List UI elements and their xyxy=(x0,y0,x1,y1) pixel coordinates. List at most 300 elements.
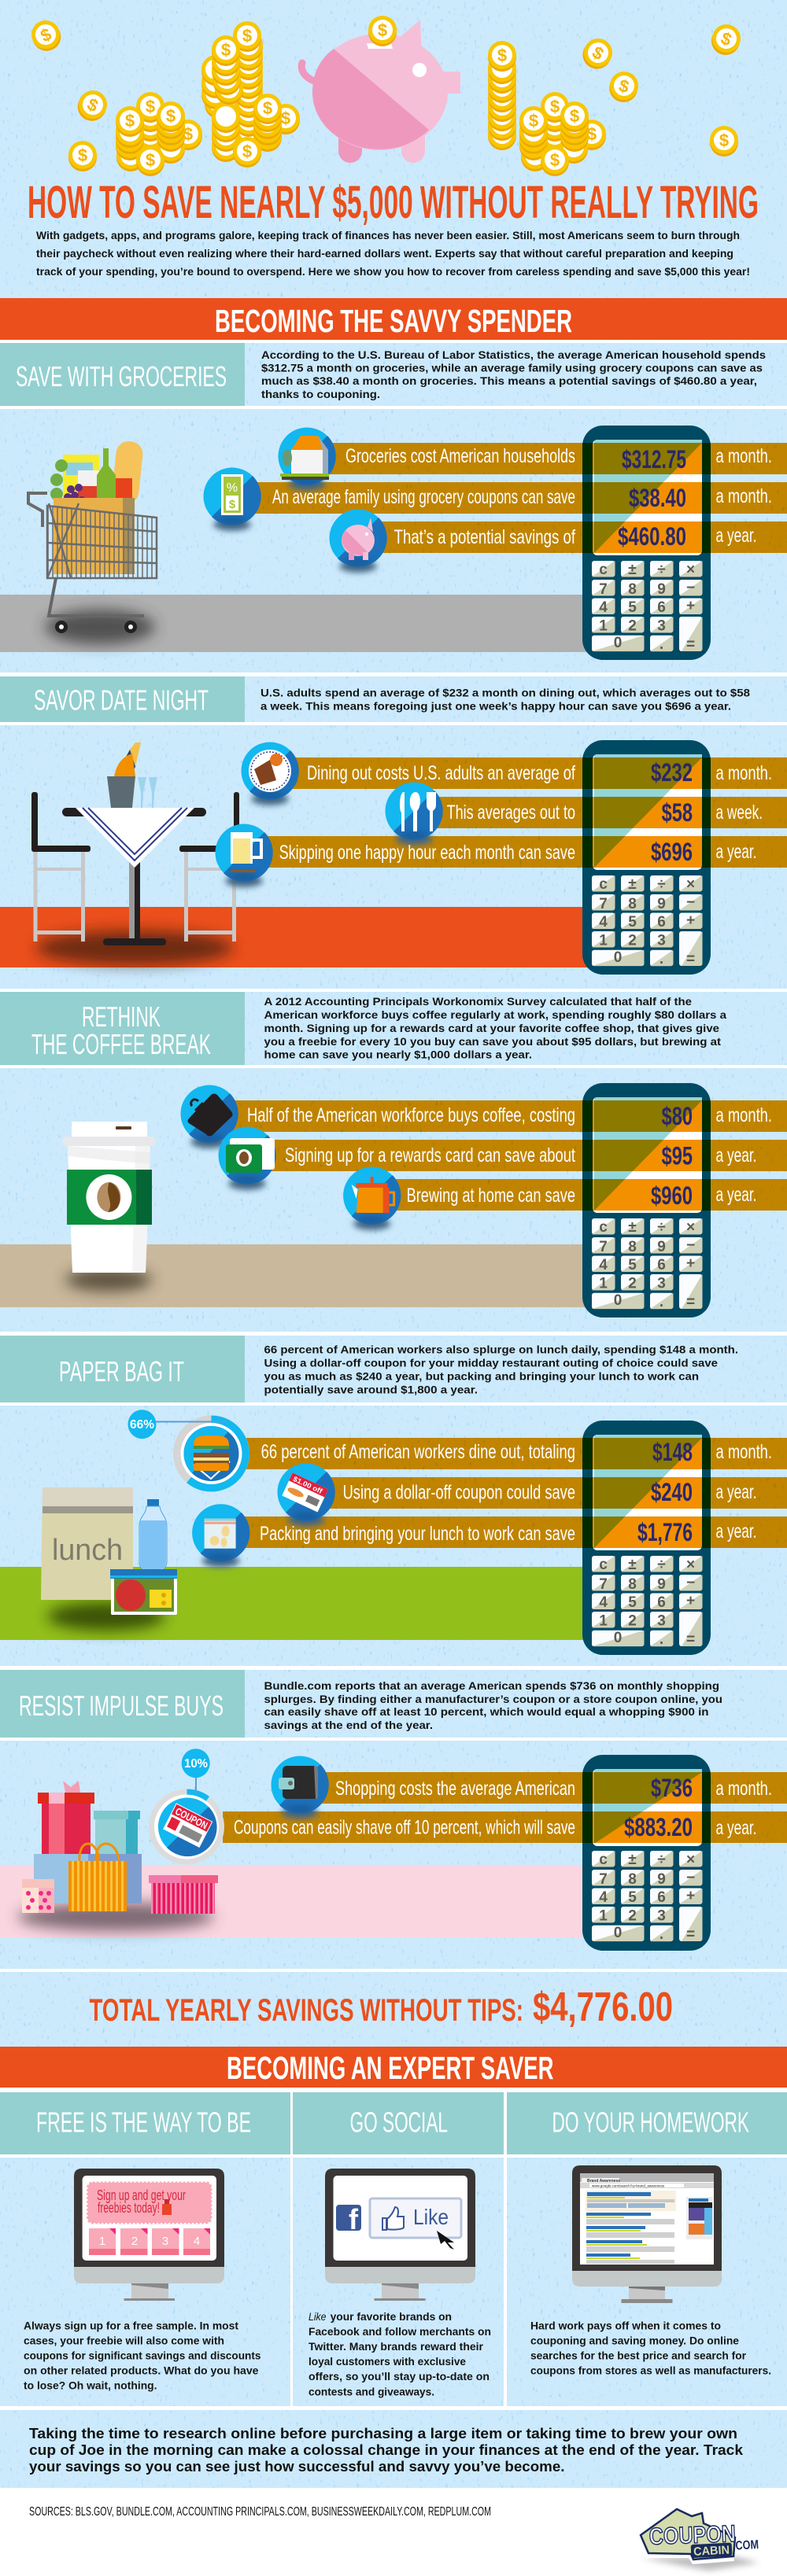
calculator: = xyxy=(686,636,695,653)
paragraph: According to the U.S. Bureau of Labor Statistics, the average American household spends xyxy=(261,348,766,361)
section header: THE COFFEE BREAK xyxy=(31,1028,211,1060)
total yearly savings xyxy=(0,1969,787,2030)
section header xyxy=(0,992,245,1065)
tip text: social xyxy=(309,2310,491,2397)
tip header: do your homework xyxy=(507,2092,787,2154)
tip text: social: contests and giveaways. xyxy=(309,2385,434,2397)
coins: tall heap: $ xyxy=(242,26,252,46)
coins: tall heap: $ xyxy=(221,40,231,60)
section header xyxy=(0,343,245,406)
time labels xyxy=(716,762,772,863)
icon: beer xyxy=(216,824,273,887)
icon: pig xyxy=(329,510,387,573)
calculator: 6 xyxy=(657,599,666,616)
calculator: 0 xyxy=(614,1292,622,1309)
intro text: track of your spending, you’re bound to overspend. Here we show you how to recover from careless spending and save $5,000 this year! xyxy=(36,265,750,278)
time labels: a year. xyxy=(716,1817,757,1839)
tip text: social: Like xyxy=(309,2310,327,2323)
savings bars xyxy=(223,1772,787,1843)
intro text: their paycheck without even realizing where their hard-earned dollars went. Experts say that without careful preparation and keeping xyxy=(36,247,733,260)
calculator: c xyxy=(599,876,608,893)
logo: coupon cabin: COUPON xyxy=(648,2521,736,2550)
logo: coupon cabin: CABIN xyxy=(693,2544,730,2559)
time labels: a year. xyxy=(716,1481,757,1503)
illustration: piggy bank and coins xyxy=(27,16,745,176)
time labels xyxy=(716,1778,772,1839)
savings bars xyxy=(209,1100,787,1211)
calculator: . xyxy=(660,951,663,967)
section header: SAVOR DATE NIGHT xyxy=(34,684,209,716)
panel: resist impulse buys xyxy=(0,1666,787,1951)
bar labels: Groceries cost American households xyxy=(345,445,575,467)
tip header: free is the way to be: FREE IS THE WAY TO BE xyxy=(36,2106,251,2138)
calculator: 6 xyxy=(657,1889,666,1906)
calculator: 4 xyxy=(599,1889,608,1906)
calculator: 2 xyxy=(628,933,637,949)
bar labels: Brewing at home can save xyxy=(407,1185,575,1207)
calculator: − xyxy=(686,1575,695,1591)
calculator: 4 xyxy=(599,599,608,616)
calculator: 9 xyxy=(657,896,666,912)
paragraph xyxy=(264,995,726,1060)
paragraph: home can save you nearly $1,000 dollars a year. xyxy=(264,1048,532,1060)
calculator: 9 xyxy=(657,581,666,598)
heading band: becoming the savvy spender xyxy=(0,298,787,340)
calculator: 1 xyxy=(599,1276,608,1292)
floor xyxy=(0,595,598,652)
tip text: free samples: Always sign up for a free sample. In most xyxy=(24,2319,238,2331)
icon: wallet xyxy=(271,1756,329,1819)
tip text: homework: coupons from stores as well as manufacturers. xyxy=(530,2364,771,2377)
coins: tall heap: $ xyxy=(242,142,252,161)
tip text: social: Twitter. Many brands reward their xyxy=(309,2340,484,2353)
closing text: your savings so you can see just how successful and savvy you’ve become. xyxy=(29,2459,565,2475)
calculator: ± xyxy=(628,1219,637,1236)
calculator: 3 xyxy=(657,1276,666,1292)
tip header: go social: GO SOCIAL xyxy=(349,2106,448,2138)
gift boxes xyxy=(17,1781,218,1931)
coins: left pile: $ xyxy=(146,97,155,116)
icon: plate xyxy=(241,743,299,805)
tip text: free samples: to lose? Oh wait, nothing. xyxy=(24,2379,157,2391)
calculator: 8 xyxy=(628,896,637,912)
calculator: 4 xyxy=(599,914,608,931)
closing text xyxy=(0,2406,787,2475)
calculator: 7 xyxy=(599,1239,608,1255)
amounts: $1,776 xyxy=(637,1518,693,1546)
paragraph: you a freebie for every 10 you buy can save you about $95 dollars, but brewing at xyxy=(264,1035,721,1048)
monitor: freebies sign up: 4 xyxy=(194,2235,200,2248)
calculator: . xyxy=(660,1631,663,1648)
icon: cutlery xyxy=(386,782,443,846)
calculator: 2 xyxy=(628,1276,637,1292)
tip text: homework: Hard work pays off when it comes to xyxy=(530,2319,721,2331)
intro text xyxy=(36,229,750,278)
floor xyxy=(0,1244,598,1307)
tip text: social: offers, so you’ll stay up-to-date on xyxy=(309,2370,490,2383)
amounts: $460.80 xyxy=(618,522,686,551)
section header: RESIST IMPULSE BUYS xyxy=(19,1690,224,1722)
calculator: 3 xyxy=(657,1612,666,1630)
paragraph: a week. This means foregoing just one week’s happy hour can save you $696 a year. xyxy=(260,700,731,713)
coins: scattered singles: $ xyxy=(719,131,729,150)
amounts: $736 xyxy=(651,1774,693,1802)
calculator: 7 xyxy=(599,1871,608,1888)
calculator: 8 xyxy=(628,1871,637,1888)
amounts xyxy=(618,445,686,551)
tip text: free samples: on other related products. What do you have xyxy=(24,2364,259,2377)
time labels: a year. xyxy=(716,841,757,863)
icon: coffee pot xyxy=(343,1167,401,1230)
calculator: 1 xyxy=(599,933,608,949)
paragraph: U.S. adults spend an average of $232 a month on dining out, which averages out to $58 xyxy=(260,686,750,698)
icon: dollar off coupon xyxy=(277,1463,335,1527)
calculator xyxy=(582,1421,711,1655)
piggy bank xyxy=(301,20,460,163)
coins: tall heap: $ xyxy=(281,109,290,128)
icon: coupon: % xyxy=(227,481,238,495)
bar labels: 66 percent of American workers dine out, totaling xyxy=(261,1441,575,1463)
closing text: Taking the time to research online before purchasing a large item or taking time to brew your own xyxy=(29,2426,737,2441)
monitor: freebies sign up: 3 xyxy=(162,2235,168,2248)
calculator: 8 xyxy=(628,1239,637,1255)
coins: right pile xyxy=(519,92,606,176)
callout: 66 percent xyxy=(127,1410,227,1439)
paragraph xyxy=(264,1679,722,1731)
time labels: a year. xyxy=(716,1144,757,1166)
calculator: ÷ xyxy=(657,1219,666,1236)
bar labels: Skipping one happy hour each month can save xyxy=(279,842,575,864)
bar labels: Packing and bringing your lunch to work can save xyxy=(260,1523,575,1545)
tip text: social: loyal customers with exclusive xyxy=(309,2355,466,2368)
amounts: $312.75 xyxy=(622,445,686,474)
calculator: 7 xyxy=(599,896,608,912)
panel: save with groceries xyxy=(0,340,787,660)
paragraph: month. Signing up for a rewards card at your favorite coffee shop, that gives give xyxy=(264,1022,719,1034)
calculator: ÷ xyxy=(657,562,666,578)
calculator: c xyxy=(599,1852,608,1868)
floor xyxy=(0,1865,598,1937)
total yearly savings: $4,776.00 xyxy=(533,1985,673,2030)
paragraph: can easily shave off at least 10 percent, which would equal a whopping $900 in xyxy=(264,1705,708,1718)
total yearly savings: TOTAL YEARLY SAVINGS WITHOUT TIPS: xyxy=(90,1993,523,2028)
bar labels: That’s a potential savings of xyxy=(394,526,575,548)
calculator: . xyxy=(660,636,663,653)
bar labels xyxy=(279,762,575,864)
calculator: c xyxy=(599,1557,608,1573)
heading band: becoming the savvy spender: BECOMING THE SAVVY SPENDER xyxy=(215,303,572,339)
paragraph: Using a dollar-off coupon for your midday restaurant outing of choice could save xyxy=(264,1356,718,1369)
coins: left pile: $ xyxy=(183,124,193,144)
panel: expert saver tips xyxy=(0,2088,787,2406)
coins: right column: $ xyxy=(497,46,507,65)
coins: scattered singles: $ xyxy=(37,24,54,46)
calculator: + xyxy=(686,912,695,929)
calculator: 1 xyxy=(599,1908,608,1924)
calculator: 0 xyxy=(614,949,622,966)
bar labels: Shopping costs the average American xyxy=(335,1778,575,1800)
paragraph: much as $38.40 a month on groceries. This means a potential savings of $460.80 a year, xyxy=(261,374,757,387)
calculator: 5 xyxy=(628,599,637,616)
amounts: $58 xyxy=(662,798,693,827)
calculator: × xyxy=(686,1219,695,1236)
amounts xyxy=(637,1438,693,1546)
bar labels: Dining out costs U.S. adults an average of xyxy=(307,762,575,784)
section header: SAVE WITH GROCERIES xyxy=(16,360,227,392)
calculator: . xyxy=(660,1294,663,1310)
paragraph: 66 percent of American workers also splurge on lunch daily, spending $148 a month. xyxy=(264,1343,738,1356)
calculator: 5 xyxy=(628,1594,637,1611)
time labels: a year. xyxy=(716,1184,757,1206)
monitor: search results: Brand Awareness xyxy=(587,2179,620,2184)
coins: right pile: $ xyxy=(570,106,579,126)
coins: right pile: $ xyxy=(550,97,560,116)
time labels: a year. xyxy=(716,1520,757,1542)
calculator: ± xyxy=(628,562,637,578)
tip header: free is the way to be xyxy=(0,2092,290,2154)
calculator: 4 xyxy=(599,1594,608,1611)
icon: briefcase xyxy=(181,1085,238,1148)
coins: scattered singles xyxy=(27,16,745,171)
closing text: cup of Joe in the morning can make a colossal change in your finances at the end of the year. Track xyxy=(29,2442,744,2458)
tip text: social: Facebook and follow merchants on xyxy=(309,2325,491,2338)
tip text: free samples xyxy=(24,2319,261,2391)
section header xyxy=(0,1336,245,1402)
monitor: freebies sign up: 1 xyxy=(99,2235,105,2248)
tip text: homework xyxy=(530,2319,771,2377)
calculator: 3 xyxy=(657,1908,666,1924)
bar labels: Using a dollar-off coupon could save xyxy=(343,1482,575,1504)
paragraph: you as much as $240 a year, but packing and bringing your lunch to work can xyxy=(264,1370,699,1383)
tip text: free samples: coupons for significant savings and discounts xyxy=(24,2349,261,2361)
calculator: c xyxy=(599,562,608,578)
panel: rethink the coffee break xyxy=(0,989,787,1317)
calculator: 7 xyxy=(599,581,608,598)
coins: scattered singles: $ xyxy=(719,28,734,50)
icon: rewards card xyxy=(219,1126,276,1190)
calculator: ÷ xyxy=(657,1557,666,1573)
paragraph: savings at the end of the year. xyxy=(264,1719,433,1731)
monitor: facebook like: Like xyxy=(413,2205,449,2229)
calculator: 4 xyxy=(599,1257,608,1273)
calculator: 2 xyxy=(628,618,637,634)
calculator: = xyxy=(686,1294,695,1310)
logo: coupon cabin xyxy=(635,2504,762,2570)
coins: left pile: $ xyxy=(166,106,176,126)
panel: paper bag it xyxy=(0,1332,787,1655)
amounts xyxy=(624,1774,693,1841)
amounts: $960 xyxy=(651,1181,693,1210)
coins: left pile xyxy=(116,92,202,176)
calculator: ± xyxy=(628,1852,637,1868)
calculator: + xyxy=(686,598,695,614)
calculator: 8 xyxy=(628,1576,637,1593)
monitor: facebook like xyxy=(325,2169,475,2301)
paragraph: splurges. By finding either a manufacturer’s coupon or a store coupon online, you xyxy=(264,1693,722,1705)
calculator: 6 xyxy=(657,1257,666,1273)
calculator: 2 xyxy=(628,1612,637,1630)
bar labels xyxy=(272,445,575,548)
monitor: freebies sign up: freebies today! xyxy=(98,2200,160,2216)
calculator: × xyxy=(686,1557,695,1573)
calculator: 7 xyxy=(599,1576,608,1593)
calculator xyxy=(582,740,711,975)
paragraph: A 2012 Accounting Principals Workonomix Survey calculated that half of the xyxy=(264,995,692,1008)
calculator: 9 xyxy=(657,1576,666,1593)
coin above slot: $ xyxy=(378,20,387,40)
paragraph: thanks to couponing. xyxy=(261,388,380,400)
icon: snack bag xyxy=(192,1504,249,1568)
monitor: facebook like: f xyxy=(349,2203,359,2235)
calculator: ± xyxy=(628,1557,637,1573)
paragraph xyxy=(261,348,766,400)
calculator: 0 xyxy=(614,635,622,651)
callout: 10 percent: 10% xyxy=(184,1757,208,1771)
calculator: × xyxy=(686,562,695,578)
paragraph: American workforce buys coffee regularly at work, spending roughly $80 dollars a xyxy=(264,1008,726,1021)
savings bars xyxy=(244,757,787,868)
floor xyxy=(0,907,598,967)
callout: 10 percent xyxy=(182,1749,210,1793)
calculator: 0 xyxy=(614,1925,622,1941)
coins: scattered singles: $ xyxy=(78,146,87,165)
calculator xyxy=(582,426,711,660)
tip text: homework: couponing and saving money. Do online xyxy=(530,2335,739,2347)
amounts: $80 xyxy=(662,1102,693,1130)
section header: PAPER BAG IT xyxy=(59,1355,184,1388)
calculator: 9 xyxy=(657,1871,666,1888)
icon: burger with 66 percent ring xyxy=(173,1416,249,1491)
calculator: . xyxy=(660,1926,663,1943)
calculator: − xyxy=(686,1870,695,1886)
amounts: $883.20 xyxy=(624,1813,693,1841)
bar labels xyxy=(234,1778,575,1839)
callout: 66 percent: 66% xyxy=(130,1418,154,1432)
paragraph xyxy=(260,686,750,713)
icon: coupon with 10 percent ring xyxy=(149,1789,224,1864)
calculator: ÷ xyxy=(657,876,666,893)
tip text: free samples: cases, your freebie will also come with xyxy=(24,2335,224,2347)
calculator: 5 xyxy=(628,914,637,931)
icon: dollar off coupon: $1.00 off xyxy=(292,1475,324,1495)
calculator: × xyxy=(686,876,695,893)
coins: right pile: $ xyxy=(587,124,597,144)
monitor: search results xyxy=(572,2165,722,2303)
heading band: becoming an expert saver: BECOMING AN EXPERT SAVER xyxy=(227,2050,554,2086)
paragraph: $312.75 a month on groceries, while an average family using grocery coupons can save as xyxy=(261,362,763,374)
icon: coupon: $ xyxy=(229,498,236,511)
calculator: 5 xyxy=(628,1257,637,1273)
calculator: = xyxy=(686,1926,695,1943)
section header: RETHINK xyxy=(82,1001,161,1033)
calculator: 0 xyxy=(614,1630,622,1646)
monitor: freebies sign up xyxy=(74,2169,224,2301)
calculator xyxy=(582,1083,711,1317)
calculator xyxy=(582,1755,711,1951)
amounts xyxy=(651,1102,693,1210)
amounts: $696 xyxy=(651,838,693,866)
icon: coupon xyxy=(203,467,261,531)
calculator: − xyxy=(686,580,695,596)
icon: coupon with 10 percent ring: COUPON xyxy=(173,1805,209,1831)
amounts: $38.40 xyxy=(629,484,686,512)
coins: left pile: $ xyxy=(146,150,155,170)
bar labels: This averages out to xyxy=(447,802,575,824)
amounts: $148 xyxy=(652,1438,693,1466)
floor xyxy=(0,1567,598,1640)
panel: savor date night xyxy=(0,673,787,975)
coins: right pile: $ xyxy=(529,111,538,131)
table and stools xyxy=(31,743,239,965)
monitor: freebies sign up: Sign up and get your xyxy=(97,2187,186,2203)
paragraph: Bundle.com reports that an average American spends $736 on monthly shopping xyxy=(264,1679,719,1692)
calculator: + xyxy=(686,1255,695,1272)
paragraph: potentially save around $1,800 a year. xyxy=(264,1383,478,1395)
tip text: social: your favorite brands on xyxy=(331,2310,452,2323)
calculator: = xyxy=(686,1631,695,1648)
amounts: $240 xyxy=(651,1478,693,1506)
bar labels: Coupons can easily shave off 10 percent, which will save xyxy=(234,1817,575,1839)
bar labels: Signing up for a rewards card can save about xyxy=(285,1144,575,1166)
calculator: 2 xyxy=(628,1908,637,1924)
heading band: becoming an expert saver xyxy=(0,2047,787,2088)
calculator: 1 xyxy=(599,1612,608,1630)
coins: tall heap xyxy=(201,21,300,168)
calculator: 5 xyxy=(628,1889,637,1906)
coffee cup xyxy=(62,1122,156,1292)
intro text: With gadgets, apps, and programs galore, keeping track of finances has never been easier. Still, most Americans seem to burn through xyxy=(36,229,740,241)
amounts xyxy=(651,758,693,866)
calculator: ± xyxy=(628,876,637,893)
icon: house xyxy=(279,428,336,491)
coins: scattered singles: $ xyxy=(617,76,631,97)
calculator: c xyxy=(599,1219,608,1236)
calculator: 6 xyxy=(657,1594,666,1611)
time labels xyxy=(716,1441,772,1542)
calculator: × xyxy=(686,1852,695,1868)
bar labels: An average family using grocery coupons can save xyxy=(272,486,575,508)
coins: tall heap: $ xyxy=(263,98,272,118)
time labels: a year. xyxy=(716,525,757,547)
time labels: a week. xyxy=(716,802,763,824)
calculator: ÷ xyxy=(657,1852,666,1868)
time labels xyxy=(716,445,772,547)
calculator: + xyxy=(686,1593,695,1609)
amounts: $95 xyxy=(662,1142,693,1170)
paper bag lunch: lunch xyxy=(52,1534,123,1567)
tip text: homework: searches for the best price and search for xyxy=(530,2349,747,2361)
bar labels xyxy=(260,1441,575,1545)
section header xyxy=(0,676,245,722)
bar labels: Half of the American workforce buys coffee, costing xyxy=(247,1104,575,1126)
sources: SOURCES: BLS.GOV, BUNDLE.COM, ACCOUNTING PRINCIPALS.COM, BUSINESSWEEKDAILY.COM, REDPLUM.COM xyxy=(29,2505,491,2519)
coin above slot xyxy=(368,16,397,46)
time labels xyxy=(716,1104,772,1206)
paper bag lunch xyxy=(41,1487,177,1631)
paragraph xyxy=(264,1343,738,1395)
calculator: = xyxy=(686,951,695,967)
savings bars xyxy=(232,443,787,553)
amounts: $232 xyxy=(651,758,693,787)
coins: right column xyxy=(488,41,516,150)
calculator: − xyxy=(686,1237,695,1254)
monitor: freebies sign up: 2 xyxy=(131,2235,138,2248)
shopping cart xyxy=(28,440,157,644)
coins: scattered singles: $ xyxy=(84,94,102,116)
bar labels xyxy=(247,1104,575,1207)
calculator: 3 xyxy=(657,618,666,634)
monitor: search results: www.google.com/search?q=brand_awareness xyxy=(592,2184,665,2188)
